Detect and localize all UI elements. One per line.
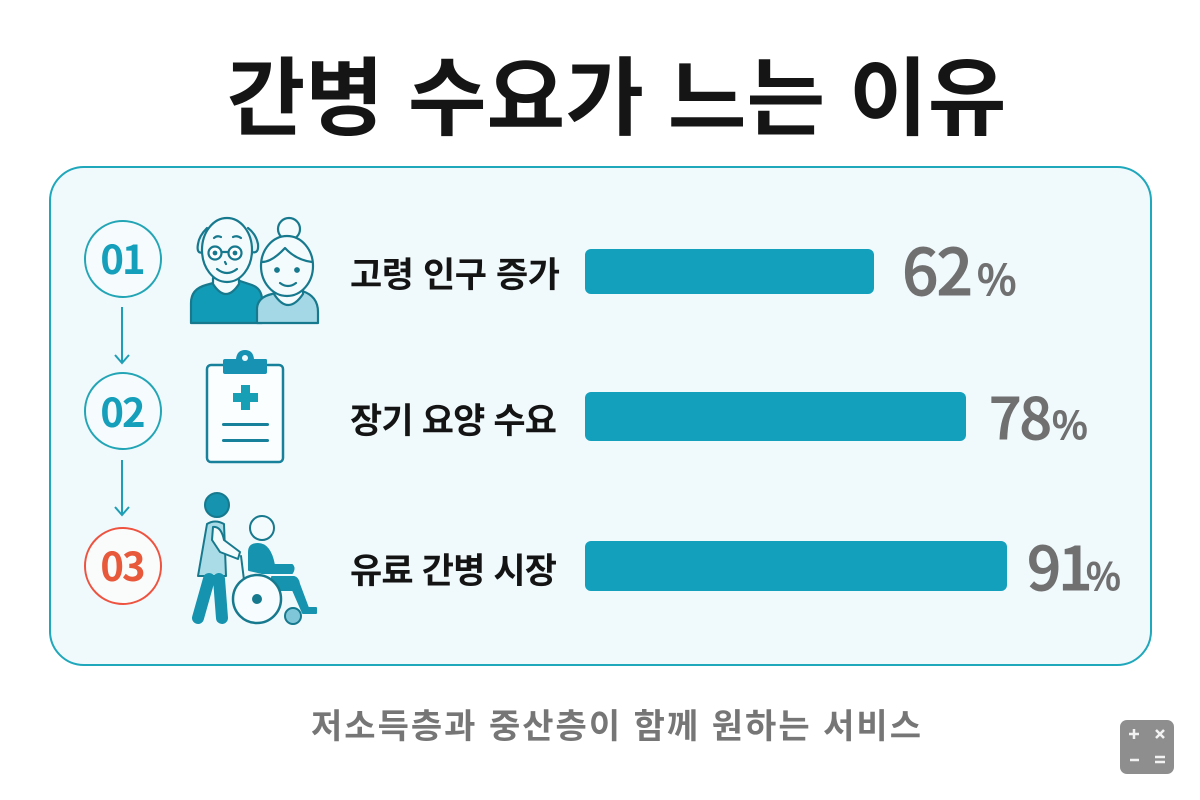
step badge 02: 02: [100, 381, 144, 439]
title: 간병 수요가 느는 이유: [227, 29, 1006, 153]
arrow: 02 to 03: [115, 460, 129, 515]
value: 78%: 78: [989, 374, 1050, 456]
step badge 03: [85, 528, 161, 604]
label: 유료 간병 시장: 유료 간병 시장: [350, 543, 557, 594]
step badge 02: [85, 373, 161, 449]
step badge 01: [85, 221, 161, 297]
value: 91%: %: [1086, 547, 1121, 601]
value: 62%: %: [977, 247, 1016, 308]
icon: caregiver with wheelchair: [198, 493, 316, 624]
step badge 01: 01: [100, 228, 144, 286]
bar: 91%: [585, 541, 1007, 591]
value: 62%: 62: [902, 222, 971, 314]
label: 고령 인구 증가: 고령 인구 증가: [350, 247, 560, 298]
value: 78%: %: [1052, 395, 1088, 450]
bar: 78%: [585, 392, 966, 441]
footer caption: 저소득층과 중산층이 함께 원하는 서비스: [311, 699, 921, 748]
arrow: 01 to 02: [115, 307, 129, 363]
icon: elderly couple: [191, 218, 318, 323]
icon: medical clipboard: [207, 350, 283, 462]
panel: reasons: [50, 167, 1151, 665]
bar: 62%: [585, 249, 874, 294]
step badge 03: 03: [100, 535, 144, 593]
label: 장기 요양 수요: 장기 요양 수요: [350, 393, 557, 444]
value: 91%: 91: [1027, 521, 1089, 608]
icon: calculator: [1120, 720, 1174, 774]
